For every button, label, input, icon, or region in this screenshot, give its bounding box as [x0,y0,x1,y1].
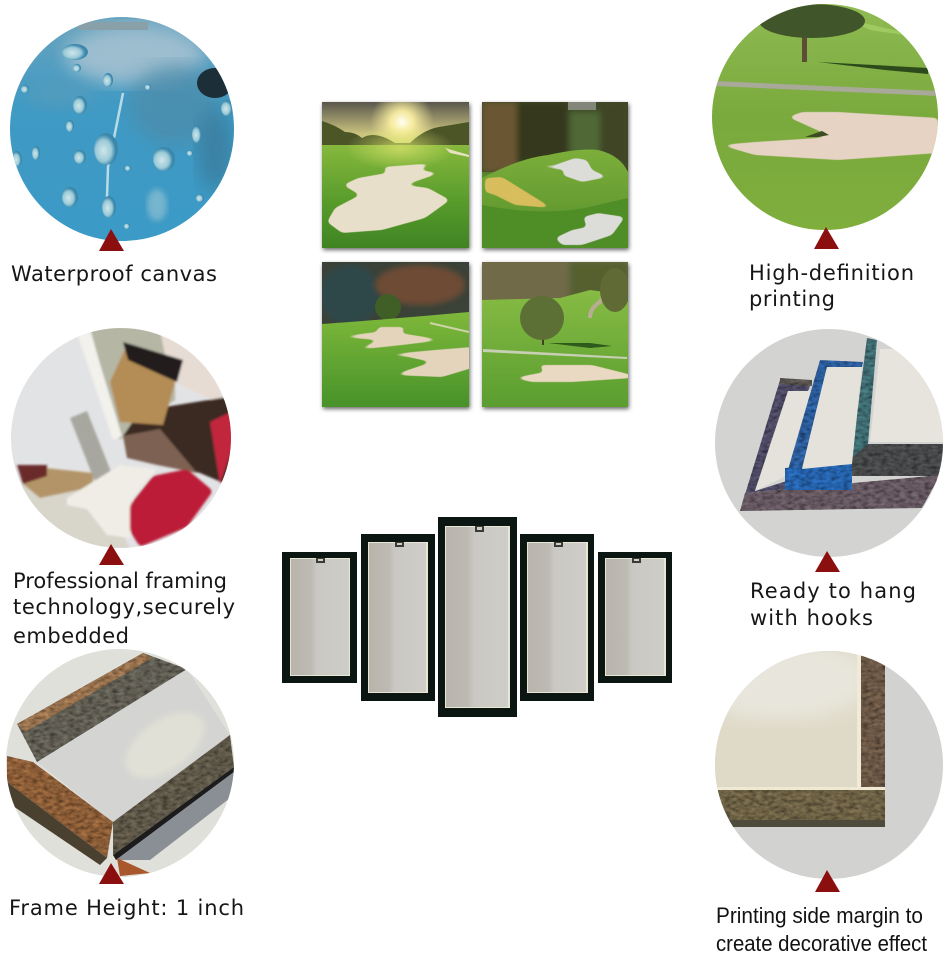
label: framing technology [13,569,235,648]
label: framing technology: embedded [13,624,129,648]
label: high-definition printing: High-definition [749,261,914,285]
canvas panel: bottom left bunkers [320,262,472,407]
circle photo: golf bunker [712,4,938,230]
canvas panel: bottom right tree fairway [482,262,632,407]
circle photo: frame height edges [5,648,235,878]
label: printing side margin: Printing side margin to [716,903,923,928]
frame back: centre [438,517,517,717]
label: high-definition printing [749,261,914,311]
label: waterproof canvas: Waterproof canvas [11,262,217,286]
frame back: inner left [361,534,435,701]
label: ready to hang: with hooks [750,606,873,630]
label: ready to hang [750,579,916,630]
marker: frame height [99,863,124,884]
frame back: far left [282,552,357,683]
label: framing technology: Professional framing [13,569,227,593]
label: printing side margin [716,903,927,955]
frame back: far right [598,552,672,683]
canvas panel: top left sunrise fairway [322,90,469,248]
marker: framing [99,544,124,565]
circle photo: stacked frames with hooks [715,329,945,557]
canvas panel: top right forest fairway [482,102,628,248]
label: high-definition printing: printing [749,287,835,311]
marker: high-definition [814,227,839,249]
label: ready to hang: Ready to hang [750,579,916,603]
marker: printing side margin [815,870,840,892]
marker: waterproof canvas [99,229,124,251]
marker: ready to hang [815,551,840,572]
label: framing technology: technology,securely [13,595,235,619]
frame back: inner right [520,534,594,701]
circle photo: canvas side margin [715,651,943,879]
circle photo: framing with staple gun [10,327,233,549]
circle photo: water drops on canvas [9,16,235,242]
label: frame height: Frame Height: 1 inch [9,896,244,920]
